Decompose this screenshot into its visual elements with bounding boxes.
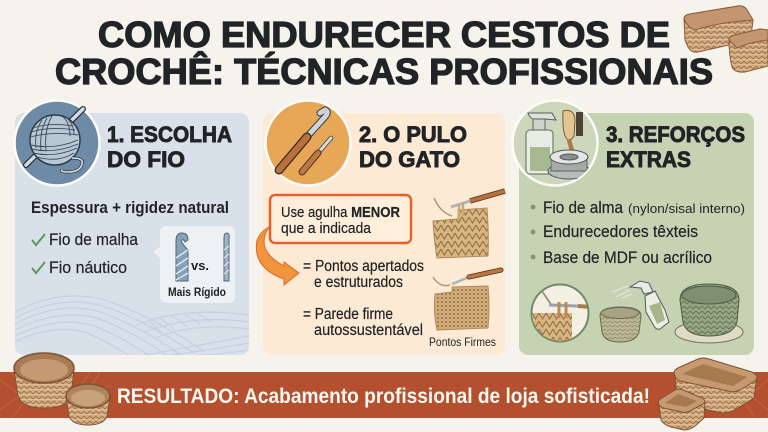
checklist: Fio de malha [49,230,138,249]
result text: autossustentável [314,322,423,339]
title [55,14,713,92]
checklist [32,230,138,277]
icon: baskets left [14,353,110,425]
banner text: RESULTADO: Acabamento profissional de loja sofisticada! [117,385,650,408]
heading 1 [107,122,232,172]
subheading: Espessura + rigidez natural [31,198,229,217]
banner [0,353,768,430]
bullet list [530,198,745,267]
card: rigid comparison: vs. [191,258,209,273]
card: rigid comparison: Mais Rígido [168,287,226,299]
title: COMO ENDURECER CESTOS DE [98,14,670,55]
bullet list: (nylon/sisal interno) [628,201,745,216]
icon: baskets right [658,358,757,430]
bullet list: Base de MDF ou acrílico [543,248,712,267]
result text [303,258,424,339]
bullet list: Fio de alma [543,198,623,217]
illustration: swatch firm [433,270,501,330]
callout: Use agulha MENOR [281,204,400,221]
heading 2: 2. O PULO [359,122,467,147]
caption: Pontos Firmes [429,337,496,349]
callout: que a indicada [281,220,372,237]
callout [270,195,411,243]
bullet list: Endurecedores têxteis [543,222,698,241]
panel: reforços extras [512,100,754,355]
icon: crochet hooks [266,100,350,186]
heading 1: DO FIO [107,147,185,172]
icon: spray, brush, spool [512,100,598,186]
result text: = Pontos apertados [303,258,424,275]
result text: e estruturados [314,274,403,291]
icon: yarn ball [14,100,100,186]
result text: = Parede firme [303,306,393,323]
checklist: Fio náutico [49,258,127,277]
illustration: core yarn detail [530,284,592,343]
heading 3: 3. REFORÇOS [606,122,745,147]
card: rigid comparison [153,226,235,303]
heading 3 [606,122,745,172]
title: CROCHÊ: TÉCNICAS PROFISSIONAIS [55,50,713,92]
panel: o pulo do gato [256,100,505,355]
heading 3: EXTRAS [606,147,691,172]
heading 2 [359,122,467,172]
panel: escolha do fio [14,100,249,356]
heading 1: 1. ESCOLHA [107,122,232,147]
heading 2: DO GATO [359,147,460,172]
illustration: big basket on base [675,284,743,343]
icon: baskets top right [684,6,768,72]
arrow [256,227,299,285]
illustration: swatch loose [433,191,505,258]
illustration: small basket with spray [600,281,669,342]
